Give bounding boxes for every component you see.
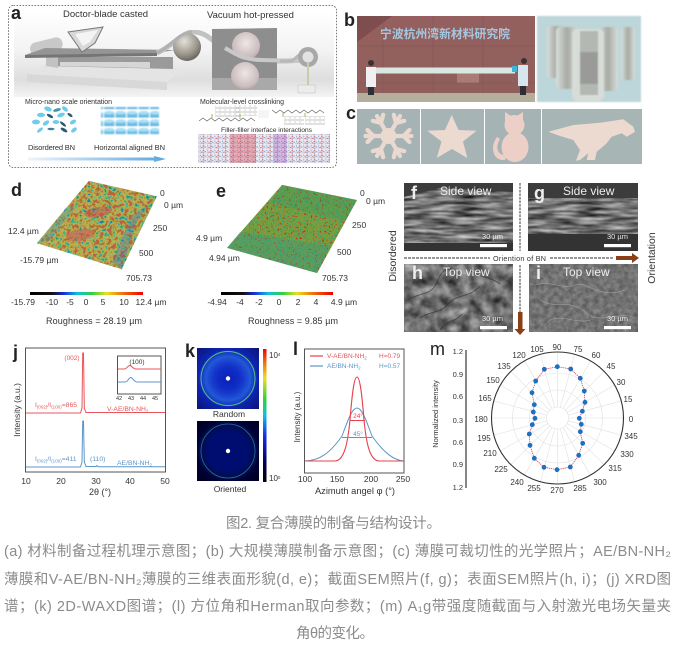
legend l: H=0.57: [379, 363, 401, 370]
panel c: cut film shapes: [346, 103, 642, 164]
panel letter l: l: [293, 339, 298, 359]
text: orientation of BN: Oriention of BN: [493, 254, 546, 263]
panel e: smooth surface 3D map: [196, 180, 385, 326]
radial axis bar: 1.2: [453, 347, 463, 356]
legend l: AE/BN-NH: [327, 363, 358, 370]
SEM h: top view: 30 µm: [482, 314, 503, 323]
annotations j: V-AE/BN-NH: [107, 406, 146, 413]
panel m: polar chart: [430, 339, 638, 495]
colorbar e: 0: [277, 297, 282, 307]
text: molecular-level crosslinking: Molecular-level crosslinking: [200, 99, 284, 106]
inset chart: 45: [152, 396, 158, 402]
SEM g: side view: [528, 183, 638, 251]
caption title: 图2. 复合薄膜的制备与结构设计。: [226, 514, 441, 532]
panel k: 2D-WAXD patterns: [185, 341, 281, 494]
colorbar max: 10: [269, 351, 278, 360]
axis labels e: 0 µm: [366, 196, 385, 206]
text: micro-nano scale orientation: Micro-nano scale orientation: [25, 99, 112, 106]
SEM g: side view: Side view: [563, 184, 615, 198]
photo: researchers holding film: [357, 16, 535, 102]
polar angle labels: 45: [607, 362, 616, 371]
y axis title j: Intensity (a.u.): [12, 383, 22, 437]
colorbar d: -10: [46, 297, 58, 307]
colorbar d: 5: [101, 297, 106, 307]
label: disordered: Disordered: [387, 230, 399, 282]
divider text: filler-filler interface interactions: Filler-filler interface interactions: [221, 127, 313, 134]
illustration: take-up reel: [280, 47, 318, 93]
colorbar e: 2: [296, 297, 301, 307]
shape: cat: [493, 112, 528, 162]
axis labels e: 705.73: [322, 273, 348, 283]
series: AE/BN-NH2: [26, 421, 165, 467]
polar angle labels: 75: [574, 345, 583, 354]
x axis ticks l: 200: [364, 474, 378, 484]
SEM i: top view: Top view: [563, 265, 610, 279]
annotations j: /I: [47, 402, 51, 409]
colorbar e: -4: [236, 297, 244, 307]
panel letter e: e: [216, 181, 226, 201]
shape: dinosaur: [548, 119, 635, 161]
panel a frame: [8, 6, 336, 168]
colorbar d: [11, 292, 166, 307]
inset chart: [116, 356, 161, 402]
axis labels e: 250: [352, 220, 366, 230]
roughness value e: Roughness = 9.85 µm: [248, 316, 338, 326]
SEM h: top view: h: [412, 263, 423, 283]
annotations j: (002): [37, 458, 48, 464]
colorbar k: [263, 349, 266, 482]
annotations j: 2: [146, 408, 149, 414]
colorbar d: -15.79: [11, 297, 35, 307]
FWHM 24 marker: [350, 412, 365, 420]
panel letter b: b: [344, 10, 355, 30]
heading: vacuum hot-pressed: Vacuum hot-pressed: [207, 10, 294, 21]
shape: snowflake: [366, 113, 412, 159]
arrow: orientation direction: [28, 156, 166, 162]
colorbar e: [207, 292, 357, 307]
panel letter c: c: [346, 103, 356, 123]
panel letter m: m: [430, 339, 445, 359]
annotations j: =411: [62, 456, 77, 463]
FWHM 24 marker: 24°: [353, 412, 363, 420]
colorbar d: 0: [84, 297, 89, 307]
polar angle labels: 225: [494, 465, 508, 474]
axis labels e: 500: [337, 247, 351, 257]
polar angle labels: 270: [550, 486, 564, 495]
curve: V-AE/BN-NH2: [305, 377, 404, 461]
annotations j: /I: [47, 456, 51, 463]
illustration: casting table: [25, 27, 183, 90]
diagram: crosslinked molecules: [199, 105, 325, 125]
y axis title m: Normalized intensity: [431, 380, 440, 448]
colorbar e: -4.94: [207, 297, 227, 307]
annotations j: (100): [51, 404, 62, 410]
colorbar min: 10: [269, 474, 278, 483]
axis labels e: [196, 188, 385, 283]
x axis ticks l: 250: [396, 474, 410, 484]
panel d: rough surface 3D map: [8, 178, 183, 326]
polar angle labels: 120: [512, 351, 526, 360]
polar angle labels: [474, 343, 638, 495]
annotations j: (100): [51, 458, 62, 464]
curve: AE/BN-NH2: [305, 408, 404, 461]
icon: disordered BN flakes: [32, 105, 78, 134]
radial axis bar: 0.9: [453, 460, 463, 469]
annotations j: =865: [62, 402, 77, 409]
dashed vertical axis: [519, 183, 521, 312]
icon: horizontally aligned BN stack: [101, 107, 159, 134]
radial axis bar: 0.6: [453, 392, 463, 401]
x axis ticks j: 40: [125, 476, 135, 486]
plot frame j: [26, 348, 166, 472]
x axis title j: 2θ (°): [89, 487, 111, 497]
inset chart: 44: [140, 396, 146, 402]
SEM g: side view: 30 µm: [607, 232, 628, 241]
panel letter j: j: [12, 342, 18, 362]
heading: doctor-blade casted: Doctor-blade casted: [63, 9, 148, 20]
polar angle labels: 0: [629, 415, 634, 424]
polar angle labels: 330: [620, 450, 634, 459]
panel letter d: d: [11, 180, 22, 200]
photo: rolled film tubes: [537, 16, 641, 102]
polar angle labels: 345: [624, 432, 638, 441]
radial axis bar: 0.3: [453, 416, 463, 425]
annotations j: (110): [90, 456, 105, 463]
polar angle labels: 30: [617, 378, 626, 387]
axis labels d: 705.73: [126, 273, 152, 283]
chart: 3D surface e: [227, 184, 357, 274]
colorbar d: 10: [119, 297, 129, 307]
annotations j: (002): [37, 404, 48, 410]
FWHM 45 marker: [342, 430, 372, 438]
caption line 2: (a) 材料制备过程机理示意图；(b) 大规模薄膜制备示意图；(c) 薄膜可裁切性的光学照片；AE/BN-NH₂: [4, 542, 671, 560]
plot frame l: [304, 349, 404, 473]
SEM f: side view: Side view: [440, 184, 492, 198]
x axis ticks j: 20: [56, 476, 66, 486]
colorbar e: 4: [314, 297, 319, 307]
annotations j: AE/BN-NH: [117, 460, 149, 467]
axis labels d: -15.79 µm: [20, 255, 58, 265]
polar angle labels: 210: [483, 449, 497, 458]
x axis ticks l: [298, 474, 410, 484]
polar angle labels: 285: [573, 484, 587, 493]
arrow: right: [616, 253, 639, 263]
panel letter a: a: [11, 3, 22, 23]
x axis ticks l: 100: [298, 474, 312, 484]
caption line 3: 薄膜和V-AE/BN-NH₂薄膜的三维表面形貌(d, e)；截面SEM照片(f, g)；表面SEM照片(h, i)；(j) XRD图: [4, 571, 671, 588]
axis labels d: [8, 188, 183, 283]
SEM f: side view: [404, 183, 513, 251]
annotations j: I: [35, 402, 37, 409]
radial axis bar: 0.9: [453, 370, 463, 379]
radial axis bar: [453, 347, 466, 492]
SEM h: top view: [404, 263, 513, 332]
SEM i: top view: 30 µm: [607, 314, 628, 323]
colorbar e: 4.9 µm: [331, 297, 357, 307]
legend l: 2: [358, 366, 361, 370]
colorbar max: 4: [278, 352, 281, 357]
series: V-AE/BN-NH2: [26, 353, 165, 413]
SEM i: top view: i: [536, 263, 541, 283]
axis labels d: 250: [153, 223, 167, 233]
axis labels e: 4.94 µm: [209, 253, 240, 263]
legend l: 2: [364, 356, 367, 360]
inset chart: 42: [116, 396, 122, 402]
polar angle labels: 315: [608, 464, 622, 473]
text: horizontal aligned BN: Horizontal aligned BN: [94, 143, 165, 152]
x axis ticks j: 50: [160, 476, 170, 486]
shape: star: [427, 115, 477, 158]
polar angle labels: 255: [527, 484, 541, 493]
inset chart: (100): [129, 359, 145, 366]
polar angle labels: 60: [592, 351, 601, 360]
polar angle labels: 165: [478, 394, 492, 403]
caption block: [4, 514, 671, 642]
SEM f: side view: 30 µm: [482, 232, 503, 241]
panel letter k: k: [185, 341, 196, 361]
caption oriented: Oriented: [214, 484, 247, 494]
diagram: filler lattice: [198, 134, 330, 163]
panel a: fabrication schematic: [8, 3, 336, 168]
annotations j: I: [35, 456, 37, 463]
panels f-i: SEM images: [387, 183, 658, 335]
axis labels e: 0: [360, 188, 365, 198]
panel j: XRD chart: [12, 342, 170, 497]
caption line 5: 角θ的变化。: [296, 625, 374, 642]
polar angle labels: 15: [624, 395, 633, 404]
inset chart: 43: [128, 396, 134, 402]
polar angle labels: 195: [477, 434, 491, 443]
photo backgrounds: [357, 109, 642, 164]
polar data points: [527, 364, 587, 472]
legend l: V-AE/BN-NH: [327, 353, 364, 360]
polar grid: [492, 352, 624, 484]
caption line 4: 谱；(k) 2D-WAXD图谱；(l) 方位角和Herman取向参数；(m) A₁g带强度随截面与入射激光电场矢量夹: [4, 598, 671, 615]
axis labels d: 12.4 µm: [8, 226, 39, 236]
x axis ticks j: 30: [91, 476, 101, 486]
annotations j: (002): [64, 355, 80, 362]
colorbar d: -5: [66, 297, 74, 307]
legend l: H=0.79: [379, 353, 401, 360]
axis labels e: 4.9 µm: [196, 233, 222, 243]
polar fitted curve: [529, 367, 585, 470]
chart: 3D surface d: [36, 180, 157, 270]
annotations j: 2: [149, 462, 152, 468]
SEM f: side view: f: [411, 183, 418, 203]
FWHM 45 marker: 45°: [353, 430, 363, 438]
polar angle labels: 135: [497, 362, 511, 371]
axis labels d: 500: [139, 248, 153, 258]
colorbar min: 0: [278, 475, 281, 480]
polar angle labels: 180: [474, 415, 488, 424]
polar angle labels: 240: [510, 478, 524, 487]
panel a backdrop: [14, 12, 334, 97]
polar angle labels: 105: [530, 345, 544, 354]
SEM g: side view: g: [534, 183, 545, 203]
axis labels d: 0 µm: [164, 200, 183, 210]
illustration: film ribbon and sphere: [157, 32, 305, 62]
polar angle labels: 90: [553, 343, 562, 352]
roughness value d: Roughness = 28.19 µm: [46, 316, 142, 326]
SEM h: top view: Top view: [443, 265, 490, 279]
polar angle labels: 300: [593, 478, 607, 487]
y axis title l: Intensity (a.u.): [293, 391, 302, 442]
colorbar d: 12.4 µm: [136, 297, 166, 307]
text: institute sign: 宁波杭州湾新材料研究院: [380, 27, 510, 41]
arrow: down: [514, 312, 526, 335]
panel b: large scale film photographs: [344, 10, 641, 102]
dashed horizontal axis: [404, 257, 614, 259]
panel l: azimuth chart: [293, 339, 410, 496]
annotations j: [35, 355, 152, 468]
polar angle labels: 150: [486, 376, 500, 385]
WAXD oriented pattern: [197, 421, 259, 481]
x axis ticks j: 10: [21, 476, 31, 486]
caption random: Random: [213, 409, 245, 419]
radial axis bar: 1.2: [453, 483, 463, 492]
axis labels d: 0: [160, 188, 165, 198]
WAXD random pattern: [197, 348, 259, 409]
x axis ticks j: [21, 476, 170, 486]
x axis ticks l: 150: [330, 474, 344, 484]
radial axis bar: 0.6: [453, 438, 463, 447]
label: orientation: Orientation: [646, 232, 658, 284]
SEM i: top view: [529, 263, 638, 332]
legend l: [310, 353, 401, 370]
x axis title l: Azimuth angel φ (°): [315, 486, 395, 496]
colorbar e: -2: [255, 297, 263, 307]
illustration: hot press rollers: [212, 28, 300, 90]
text: disordered BN: Disordered BN: [28, 143, 75, 152]
